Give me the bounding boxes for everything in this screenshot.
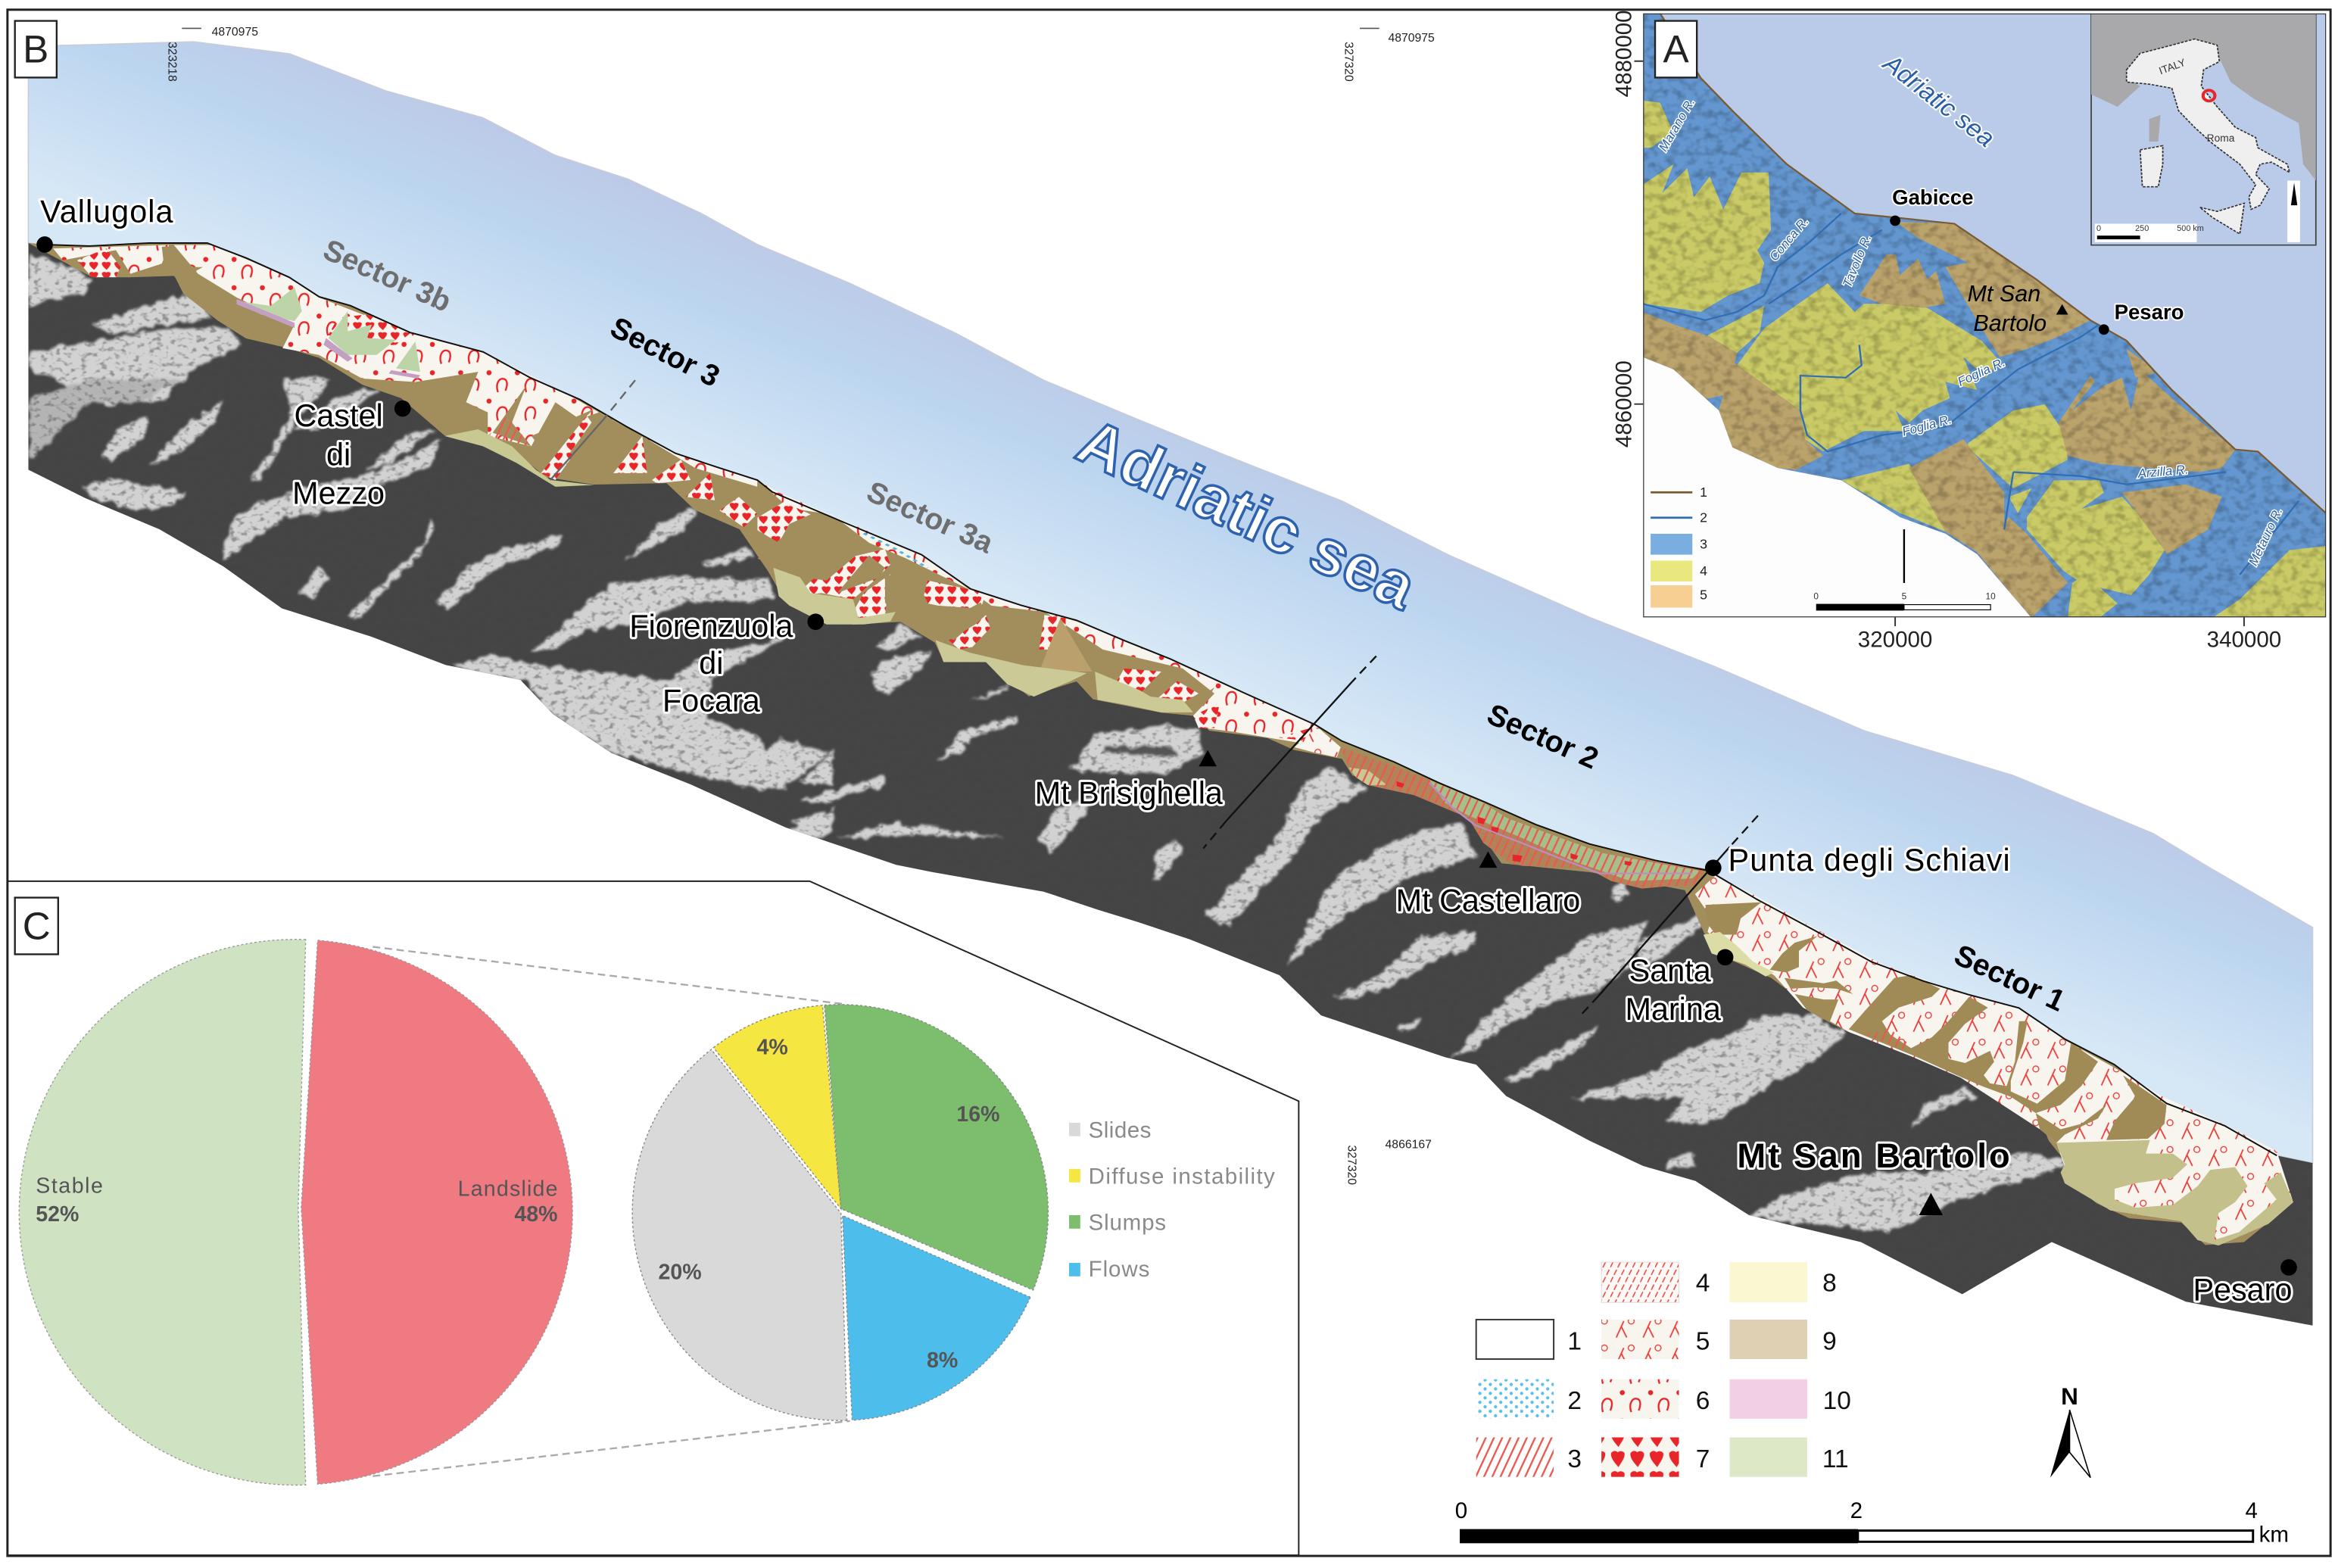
scale numbers: 2 [1850,1498,1863,1523]
pie: slides slice [632,1049,847,1420]
Flows text: Flows [1089,1257,1149,1282]
Diffuse text: Diffuse instability [1089,1164,1275,1189]
coloured band: sector base [28,243,2292,1245]
white strip with arcs [757,480,1337,756]
letter A: A [1663,28,1690,71]
Metauro south: Metauro R. [2246,505,2286,568]
label Pesaro: Pesaro [2193,1272,2292,1307]
y label 4860000: 4860000 [1612,360,1637,447]
pie: diffuse instability slice [713,1005,841,1209]
panel letter C [15,898,58,954]
16 percent: 16% [956,1102,999,1127]
numbers column 3: 11 [1822,1445,1849,1473]
legend: map units [1476,1262,1851,1477]
48 percent: 48% [514,1202,558,1227]
label Fiorenzuola di Focara: Focara [662,683,760,718]
legend 3 [1476,1437,1554,1477]
inset land blue alluvial [1643,13,2326,618]
map coordinates [166,26,1435,1185]
light hillshade ridges [29,254,2065,1232]
inset hillshade texture [1643,14,2326,617]
scale bar black [1460,1529,1858,1543]
Flows key [1069,1263,1080,1277]
sector 1 details [1695,875,2293,1245]
coord top left [182,27,201,29]
Foglia lower: Foglia R. [1900,412,1953,439]
panel C: pie charts [8,881,1298,1555]
numbers column 2: 7 [1696,1445,1710,1473]
olive deposits [2056,1140,2293,1245]
numbers column 2: 6 [1696,1387,1710,1415]
label Castel di Mezzo: Castel [294,398,383,433]
Slumps key [1069,1215,1080,1229]
locator neighbours [2091,14,2316,181]
legend 7 [1601,1437,1679,1477]
inset rivers and coast [1643,13,2326,575]
label Mt San Bartolo inset: Mt San [1968,281,2040,307]
coord text 5: 4866167 [1386,1138,1432,1151]
inset legend numbers: 3 [1700,537,1707,552]
Sardinia [2140,145,2163,187]
panel letter A [1655,21,1697,77]
brown spikes [162,246,642,473]
connector lines [373,947,850,1476]
coord text 3: 4870975 [1388,32,1435,45]
locator scale box [2095,223,2196,242]
dot Pesaro [2099,324,2109,335]
label Gabicce: Gabicce [1892,185,1973,209]
label Mt Brisighella: Mt Brisighella [1035,775,1223,810]
dark land base [0,223,2338,1357]
label Santa Marina: Marina [1625,992,1721,1027]
scale numbers: 4 [2246,1498,2258,1523]
numbers column 2: 5 [1696,1327,1710,1355]
study area marker [2203,90,2215,101]
red hatch patch [488,416,532,446]
sector 3a details [757,480,1337,756]
scale bar white [1858,1531,2253,1542]
inset legend box 5 [1651,585,1692,608]
Italy [2127,39,2290,210]
hillshade speckle [0,223,2338,1357]
pie legend [1069,1118,1275,1282]
ridges centre-east [1152,768,1741,1098]
locator scale numbers: 500 km [2177,224,2204,233]
letter C: C [23,905,51,948]
coord text 6: 327320 [1345,1145,1358,1185]
legend 5 [1601,1320,1679,1359]
numbers column 1: 1 [1567,1327,1582,1355]
icon: north arrow [2050,1383,2090,1478]
sea gradient [28,42,2313,1163]
Corsica [2149,115,2161,142]
inset Italy locator map [2091,14,2316,245]
inset rivers [1643,214,2299,575]
purple strips [237,299,420,379]
label Mt Castellaro: Mt Castellaro [1396,883,1580,918]
inset scale text: 10 [1986,591,1996,602]
inset yellow unit [1643,101,2326,618]
inset legend box 3 [1651,534,1692,555]
locator north arrow [2291,182,2297,205]
olive deposits [444,429,594,487]
label Punta degli Schiavi: Punta degli Schiavi [1729,843,2010,878]
inset scale white [1904,605,1990,609]
Diffuse key [1069,1169,1080,1183]
locator sea [2091,14,2316,245]
red dense dots [77,248,757,527]
inset map shapes [1643,13,2326,618]
inset legend line 1 [1651,491,1692,494]
52 percent: 52% [36,1202,79,1227]
tan slope [1039,618,1093,672]
inset legend [1651,485,1707,608]
inset legend numbers: 1 [1700,485,1707,500]
inset legend box 4 [1651,560,1692,581]
pie: landslide slice [301,940,572,1484]
pie: slumps slice [825,1005,1048,1290]
panel A: inset map [1643,13,2326,618]
numbers column 2: 4 [1696,1269,1710,1297]
label Fiorenzuola di Focara: Fiorenzuola [629,609,793,644]
sector 3a diffuse dots [864,533,927,568]
axis labels [1612,10,2281,653]
sector 2 band [1341,747,1712,889]
numbers column 1: 3 [1567,1445,1582,1473]
legend 11 [1729,1437,1807,1477]
x label 320000: 320000 [1858,628,1932,653]
sector 2 details [1294,727,1712,889]
inset legend numbers: 5 [1700,588,1707,603]
Sector 3a: Sector 3a [862,475,999,560]
legend 8 [1729,1262,1807,1302]
label Castel di Mezzo: di [326,437,351,472]
Italy labels [2158,57,2235,144]
red hatch patch [1866,1029,1911,1049]
Marano: Marano R. [1656,95,1697,154]
sector divider 2 [1203,656,1376,849]
inset legend numbers: 2 [1700,510,1707,525]
olive deposits [774,568,1193,712]
y label 4880000: 4880000 [1612,10,1637,97]
box C [15,898,58,954]
Roma: Roma [2207,132,2235,144]
coord text 1: 4870975 [212,26,258,39]
label Fiorenzuola di Focara: di [699,646,723,681]
inset white outside area [1643,357,2031,618]
ridges east [1666,1016,2065,1232]
red dots clusters [757,502,1310,740]
Adriatic sea label: Adriatic sea [1067,404,1427,623]
scale bar [1455,1498,2289,1547]
letter B: B [23,28,48,71]
locator scale black [2097,235,2140,239]
locator north [2287,181,2300,242]
label Mt San Bartolo: Mt San Bartolo [1737,1136,2010,1175]
purple boundary [1429,783,1692,874]
sector 2 olive [1348,768,1387,785]
label Vallugola: Vallugola [40,194,173,229]
Slumps text: Slumps [1089,1211,1166,1236]
arrow right half [2070,1410,2090,1478]
Sector 3: Sector 3 [605,310,725,394]
inset scale bar [1813,529,1996,610]
sector labels [319,233,2070,1018]
x label 340000: 340000 [2207,628,2281,653]
sector 2 hatch [1341,747,1712,889]
mountain triangles [1199,750,1943,1215]
Stable label: Stable [36,1174,103,1199]
box B [15,21,57,77]
green deposits [237,287,420,372]
inset frame [1643,14,2326,617]
locator scale numbers: 0 [2096,224,2101,233]
sector divider 1 [1581,815,1758,1015]
white landslide areas with arcs [53,245,757,487]
sector divider 3 [550,380,635,480]
place labels [40,194,2292,1307]
white end piece [1294,727,1341,757]
hillshade land [0,223,2338,1357]
small olive patch [1704,932,1774,977]
legend 6 [1601,1379,1679,1419]
triangle Mt San Bartolo [2056,304,2068,315]
4 percent: 4% [757,1035,788,1059]
legend 1 [1476,1320,1554,1359]
inset labels [1612,10,2286,653]
coastline [43,243,2277,1155]
legend numbers [1567,1269,1851,1473]
legend 10 [1729,1379,1807,1419]
Sector 3b: Sector 3b [319,233,456,319]
coord text 2: 323218 [166,42,179,82]
place dots [36,236,2297,1276]
Sector 2: Sector 2 [1482,697,1604,776]
Landslide label: Landslide [458,1177,558,1201]
label Castel di Mezzo: Mezzo [292,476,385,511]
ITALY: ITALY [2158,57,2187,76]
coord text 4: 327320 [1342,42,1354,82]
sector 3b and 3 details [53,245,757,527]
arrow left half [2050,1410,2070,1478]
inset coast line [1660,13,2326,513]
Sector 1: Sector 1 [1950,938,2070,1018]
inset legend numbers: 4 [1700,563,1707,578]
ridges west [29,254,382,432]
Arzilla: Arzilla R. [2137,462,2189,481]
label Mt San Bartolo inset: Bartolo [1973,310,2047,336]
inset scale text: 0 [1813,591,1819,602]
sector 2 red dots [1397,781,1632,866]
20 percent: 20% [658,1261,702,1285]
ridges west-centre [30,379,834,840]
Foglia upper: Foglia R. [1956,355,2007,389]
pie: stable slice [19,940,306,1485]
Tavollo: Tavollo R. [1840,232,1874,289]
pie: flows slice [843,1215,1030,1420]
legend 4 [1601,1262,1679,1302]
Conca: Conca R. [1766,214,1812,263]
inset brown unit [1643,222,2235,618]
brown fingers [1706,902,2167,1142]
box A [1655,21,1697,77]
inset scale text: 5 [1902,591,1907,602]
axis ticks [1634,61,2244,626]
legend 2 [1476,1379,1554,1419]
pie labels [36,1035,999,1373]
inset scale black [1816,604,1904,610]
label Pesaro: Pesaro [2115,300,2184,323]
ridges centre [757,625,1204,879]
numbers column 3: 9 [1822,1327,1837,1355]
locator scale numbers: 250 [2135,224,2149,233]
coord top right [1360,27,1379,29]
legend 9 [1729,1320,1807,1359]
label Santa Marina: Santa [1629,953,1711,988]
N letter: N [2061,1383,2078,1410]
brown spikes [757,518,1214,706]
inset legend line 2 [1651,516,1692,519]
river labels [1656,95,2286,568]
white landslide area with symbols [1695,875,2293,1245]
8 percent: 8% [927,1348,958,1373]
numbers column 3: 10 [1823,1387,1851,1415]
inset north arrow [1903,529,1905,583]
km: km [2259,1522,2289,1547]
numbers column 3: 8 [1822,1269,1837,1297]
dot Gabicce [1890,216,1900,226]
sector 2 green [1429,780,1700,881]
label Adriatic sea inset: Adriatic sea [1877,48,2000,153]
inset sea [1643,14,2326,617]
Sicily [2200,203,2244,234]
panel C background [8,881,1298,1555]
Slides key [1069,1123,1080,1136]
scale numbers: 0 [1455,1498,1467,1523]
Slides text: Slides [1089,1118,1151,1143]
numbers column 1: 2 [1567,1387,1582,1415]
panel letter B [15,21,57,77]
